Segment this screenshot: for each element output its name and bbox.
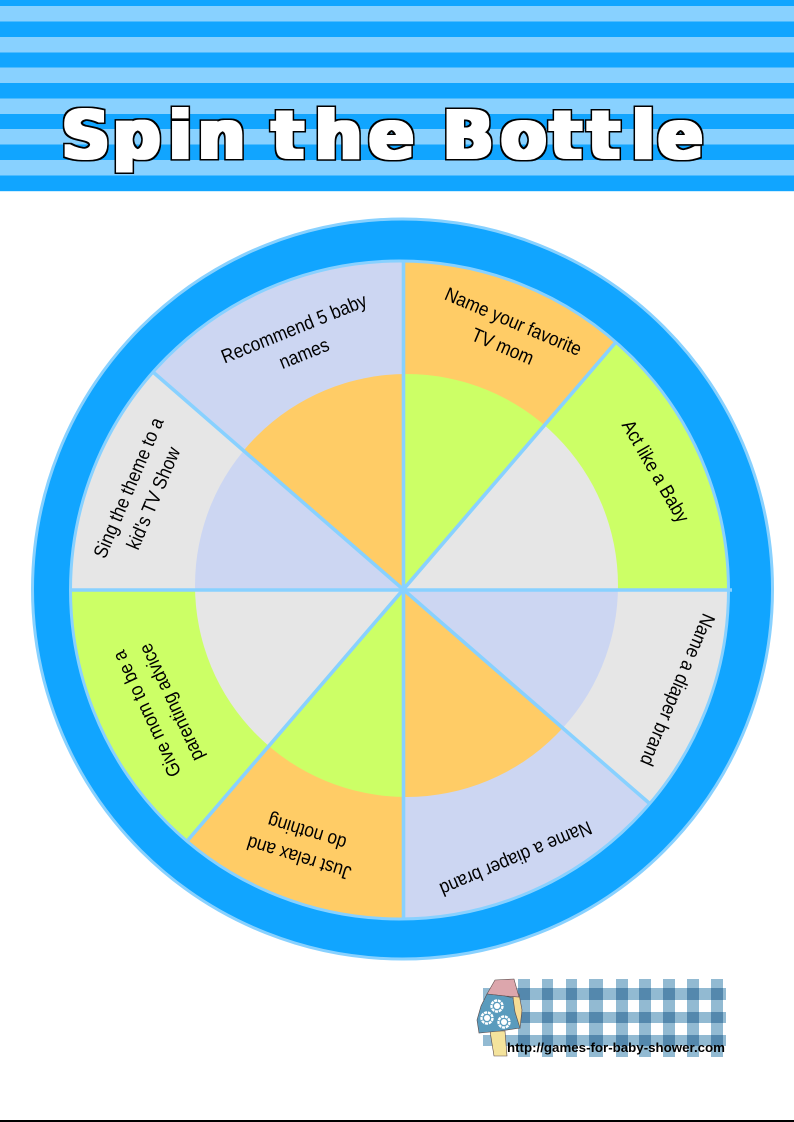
segment text: Name your favorite TV mom: TV mom <box>468 323 537 369</box>
wheel: spokes <box>70 261 732 919</box>
segment text: Sing the theme to a kid's TV Show: kid's TV Show <box>122 443 185 553</box>
segment text: Recommend 5 baby names: names <box>276 333 332 373</box>
segment text: Name your favorite TV mom: Name your favorite <box>442 282 585 360</box>
segment text: Give mom to be a parenting advice: Give mom to be a <box>107 647 185 781</box>
segment text: Name a diaper brand (bottom): Name a diaper brand <box>437 817 595 901</box>
wheel: inner segments <box>195 374 618 797</box>
segment text: Recommend 5 baby names: Recommend 5 baby <box>218 289 371 367</box>
segment text: Just relax and do nothing: Just relax and <box>244 832 354 885</box>
title: Spin the Bottle <box>62 97 703 174</box>
icon: girl in dress <box>477 979 522 1056</box>
segment text: Just relax and do nothing: do nothing <box>265 810 349 855</box>
wheel: outer segments <box>69 260 730 920</box>
bottom rule <box>0 1120 794 1122</box>
segment text: Give mom to be a parenting advice: parenting advice <box>134 640 208 765</box>
website URL: http://games-for-baby-shower.com <box>507 1041 725 1055</box>
segment text: Name a diaper brand (right): Name a diaper brand <box>636 611 720 769</box>
footer logo: gingham with figure and URL <box>477 979 726 1057</box>
header: striped banner <box>0 0 794 192</box>
wheel: outer blue ring <box>32 219 772 959</box>
segment text: Act like a Baby: Act like a Baby <box>618 416 695 527</box>
gingham pattern <box>483 979 726 1057</box>
segment text: Sing the theme to a kid's TV Show: Sing the theme to a <box>89 413 168 561</box>
